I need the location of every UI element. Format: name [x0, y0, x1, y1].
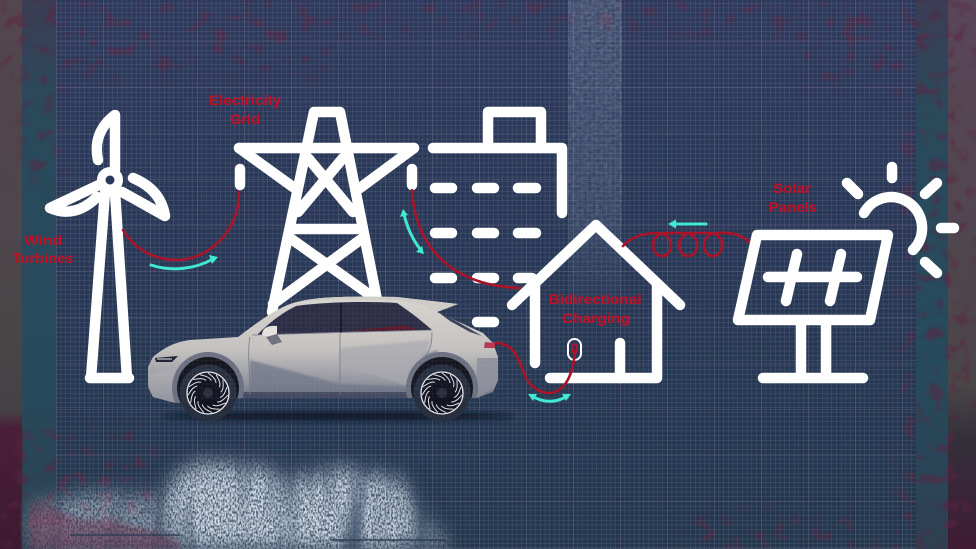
icon: house: [512, 225, 680, 378]
arrow: grid to building: [400, 209, 424, 254]
label: wind turbines: [12, 233, 74, 266]
label: electricity grid: Grid: [230, 112, 260, 127]
distressed bottom paint patch: [20, 448, 458, 549]
label: electricity grid: [209, 93, 282, 127]
car side shading: [148, 340, 498, 403]
arrow: solar to house: [668, 220, 706, 228]
icon: sun: [847, 167, 954, 273]
car tail light: [484, 342, 495, 348]
car mirror: [262, 326, 277, 337]
label: bidirectional charging: Charging: [562, 311, 630, 326]
label: solar panels: Panels: [769, 200, 817, 215]
icon: wall socket: [568, 339, 581, 360]
car ground shadow: [163, 412, 513, 420]
cable: grid to house: [412, 190, 520, 288]
grid showing through car: [148, 297, 498, 403]
label: bidirectional charging: Bidirectional: [548, 292, 642, 307]
arrow: car and house charging: [528, 394, 571, 401]
label: wind turbines: Wind: [24, 233, 62, 248]
car roof rail and spoiler: [293, 297, 458, 312]
distressed vertical light band: [568, 0, 622, 310]
car body: [148, 297, 498, 403]
label: wind turbines: Turbines: [12, 251, 74, 266]
label: electricity grid: Electricity: [209, 93, 282, 108]
icon: electricity pylon: [239, 112, 414, 312]
label: solar panels: [769, 181, 817, 215]
cable: turbine to grid: [123, 192, 239, 260]
cable: car to house socket: [495, 343, 575, 393]
label: solar panels: Solar: [773, 181, 812, 196]
cable: coiled solar to house: [623, 233, 750, 256]
icon: solar panel: [738, 235, 888, 378]
car panel lines: [249, 330, 432, 395]
car windows: [257, 302, 432, 335]
label: bidirectional charging: [548, 292, 642, 326]
icon: office building: [433, 112, 562, 322]
car wheel arches: [172, 352, 244, 403]
car headlight: [155, 356, 178, 362]
arrow: turbine to grid: [151, 255, 218, 269]
rear wheel: [414, 364, 470, 422]
front wheel: [180, 364, 236, 422]
icon: wind turbine: [50, 115, 165, 378]
car: [148, 297, 513, 424]
